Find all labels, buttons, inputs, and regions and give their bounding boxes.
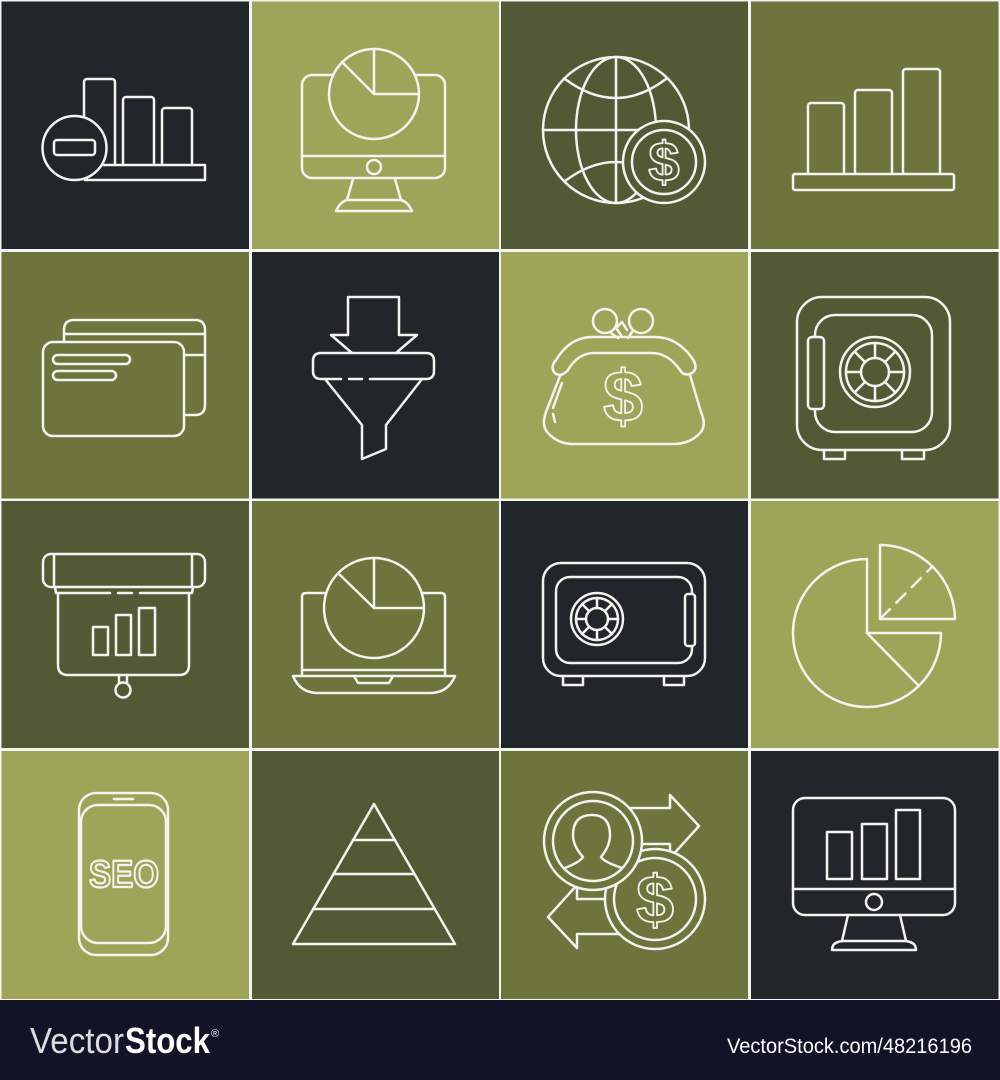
icon: dollar coin xyxy=(623,121,705,203)
logo: VectorStock: ® xyxy=(211,1028,219,1040)
icon: minus circle xyxy=(42,116,106,180)
panel: declining bar chart with minus xyxy=(2,2,249,249)
panel: coin purse xyxy=(501,252,748,498)
icon: pie chart xyxy=(324,558,424,658)
text: SEO: SEO xyxy=(89,854,159,896)
icon: user circle xyxy=(544,792,642,890)
panel: globe with dollar coin xyxy=(501,2,748,249)
icon: dollar coin: $ xyxy=(648,130,680,193)
icon: safe dial xyxy=(840,337,910,407)
panel: pie chart with detached slice xyxy=(751,501,998,748)
icon: dollar coin: $ xyxy=(636,862,674,938)
panel: rising bar chart xyxy=(751,2,998,249)
panel: pyramid xyxy=(252,751,499,999)
icon: pie chart xyxy=(329,49,419,139)
text: image id: VectorStock.com/48216196 xyxy=(727,1035,972,1058)
panel: horizontal safe xyxy=(501,501,748,748)
icon: dollar sign: $ xyxy=(603,357,643,437)
arrow: left xyxy=(548,885,620,948)
logo: VectorStock xyxy=(30,1020,219,1061)
icon: safe dial xyxy=(571,593,623,645)
panel: credit cards xyxy=(2,252,249,498)
arrow: right xyxy=(630,795,699,858)
panel: monitor with bar chart xyxy=(751,751,998,999)
footer bar xyxy=(0,1000,1000,1080)
logo: VectorStock: Vector xyxy=(30,1020,124,1061)
panel: laptop with pie chart xyxy=(252,501,499,748)
icon: dollar coin xyxy=(605,849,705,949)
panel: smartphone SEO xyxy=(2,751,249,999)
panel: square safe xyxy=(751,252,998,498)
panel: user and dollar exchange xyxy=(501,751,748,999)
panel: presentation screen xyxy=(2,501,249,748)
panel: monitor with pie chart xyxy=(252,2,499,249)
logo: VectorStock: Stock xyxy=(125,1020,211,1061)
panel: funnel with arrow xyxy=(252,252,499,498)
